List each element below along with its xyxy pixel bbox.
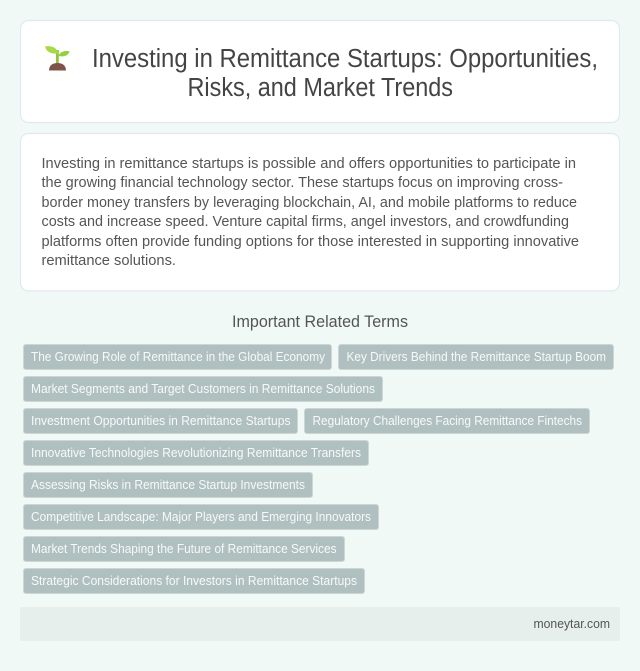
heading: related terms: Important Related Terms xyxy=(232,313,408,331)
chip: Innovative Technologies Revolutionizing Remittance Transfers xyxy=(31,446,361,460)
chip xyxy=(24,344,332,370)
chip: Regulatory Challenges Facing Remittance Fintechs xyxy=(312,414,582,428)
footer xyxy=(20,607,620,641)
term chips xyxy=(24,344,614,594)
panel: header xyxy=(20,20,620,122)
chip xyxy=(24,408,298,434)
chip xyxy=(304,408,590,434)
chip xyxy=(24,376,382,402)
chip: Strategic Considerations for Investors in Remittance Startups xyxy=(31,574,357,588)
text block: description: platforms often provide funding options for those interested in supporting innovative xyxy=(42,233,579,250)
chip xyxy=(338,344,614,370)
chip xyxy=(24,504,378,530)
text block: description: border money transfers by leveraging blockchain, AI, and mobile platforms to reduce xyxy=(42,194,577,211)
title xyxy=(92,45,598,102)
panel: description xyxy=(20,134,620,291)
chip: Competitive Landscape: Major Players and Emerging Innovators xyxy=(31,510,371,524)
icon: seedling xyxy=(45,46,70,70)
text block: description: remittance solutions. xyxy=(42,252,176,269)
chip: Assessing Risks in Remittance Startup Investments xyxy=(31,478,305,492)
chip xyxy=(24,472,312,498)
text block: description xyxy=(42,155,579,269)
text block: description: Investing in remittance startups is possible and offers opportunities to participate in xyxy=(42,155,576,172)
footer source text: moneytar.com xyxy=(534,616,610,631)
text block: description: costs and increase speed. Venture capital firms, angel investors, and crowdfunding xyxy=(42,213,569,230)
title: Investing in Remittance Startups: Opportunities, xyxy=(92,45,598,73)
chip: Market Segments and Target Customers in Remittance Solutions xyxy=(31,382,375,396)
chip: Market Trends Shaping the Future of Remittance Services xyxy=(31,542,336,556)
chip xyxy=(24,440,368,466)
text block: description: the growing financial technology sector. These startups focus on improving cross- xyxy=(42,174,563,191)
chip: Investment Opportunities in Remittance Startups xyxy=(31,414,290,428)
chip: Key Drivers Behind the Remittance Startup Boom xyxy=(346,350,606,364)
chip xyxy=(24,536,344,562)
title: Risks, and Market Trends xyxy=(188,74,453,102)
chip xyxy=(24,568,364,594)
chip: The Growing Role of Remittance in the Global Economy xyxy=(31,350,326,364)
